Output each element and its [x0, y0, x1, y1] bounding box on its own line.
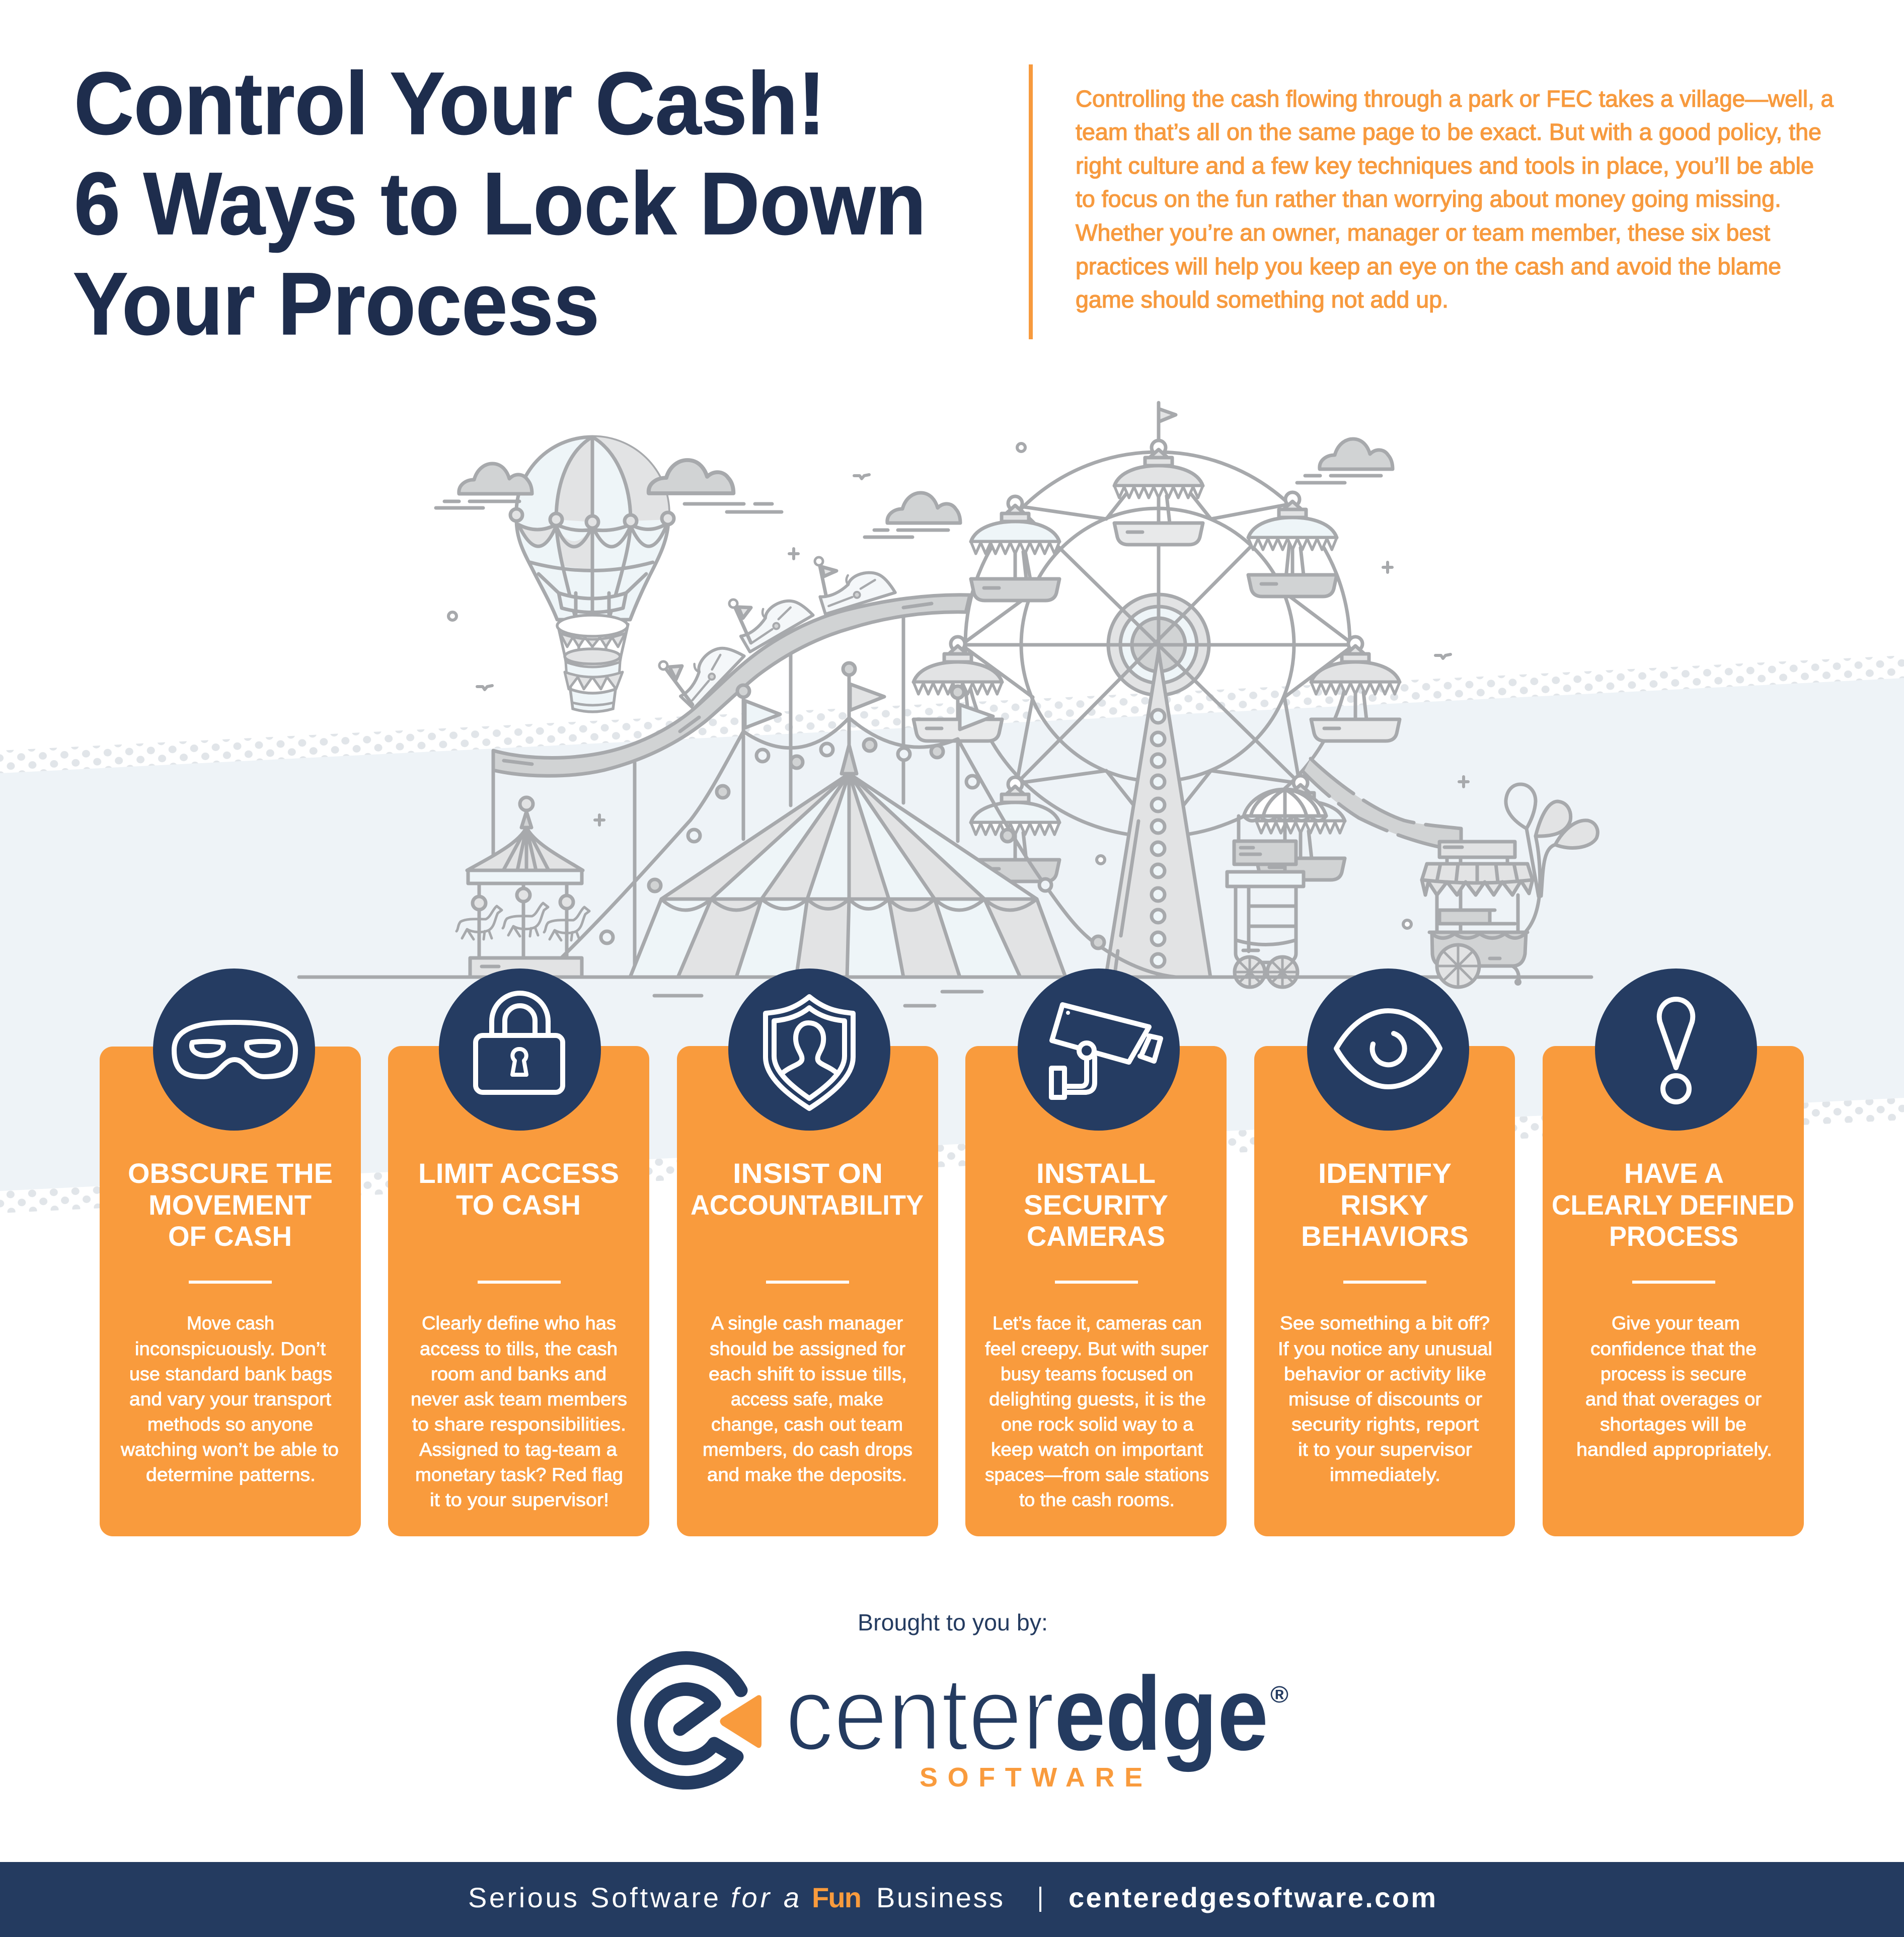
logo: centeredge software: ®: [1270, 1681, 1288, 1707]
body text: [120, 1313, 339, 1485]
coaster supports: [493, 617, 958, 977]
footer bar: Software: [590, 1882, 719, 1913]
footer bar: [0, 1862, 1904, 1937]
string lights and flags: [561, 663, 1176, 977]
title: [73, 54, 926, 353]
body text: handled appropriately.: [1576, 1439, 1772, 1460]
body text: members, do cash drops: [703, 1439, 912, 1460]
body text: delighting guests, it is the: [989, 1389, 1206, 1409]
body text: never ask team members: [411, 1389, 627, 1409]
left food cart: [1227, 789, 1326, 987]
card 3: insist on accountability: [677, 968, 938, 1536]
body text: and vary your transport: [129, 1389, 332, 1409]
heading: [128, 1157, 333, 1252]
heading: [418, 1157, 619, 1221]
body text: shortages will be: [1600, 1414, 1746, 1435]
body text: busy teams focused on: [1001, 1364, 1193, 1384]
hot air balloon: [510, 437, 674, 712]
body text: access safe, make: [731, 1389, 883, 1409]
heading: HAVE A: [1624, 1157, 1724, 1189]
footer bar: Fun: [812, 1882, 862, 1913]
slide: [1304, 759, 1461, 851]
amusement park illustration: [299, 403, 1597, 1006]
icon: exclamation mark: [1595, 968, 1757, 1131]
body text: [703, 1313, 912, 1485]
intro paragraph: right culture and a few key techniques and tools in place, you’ll be able: [1076, 153, 1814, 179]
body text: use standard bank bags: [129, 1364, 332, 1384]
heading: SECURITY: [1024, 1189, 1168, 1221]
body text: determine patterns.: [146, 1464, 316, 1485]
body text: [411, 1313, 627, 1510]
icon: mask: [153, 968, 315, 1131]
heading: ACCOUNTABILITY: [691, 1189, 924, 1221]
body text: to the cash rooms.: [1019, 1489, 1175, 1510]
ferris wheel tower: [1106, 651, 1210, 977]
right food cart with balloons: [1422, 784, 1597, 987]
title: Your Process: [73, 255, 599, 353]
body text: one rock solid way to a: [1001, 1414, 1193, 1435]
card 6: have a clearly defined process: [1543, 968, 1804, 1536]
heading: CAMERAS: [1027, 1220, 1165, 1252]
body text: it to your supervisor: [1298, 1439, 1472, 1460]
ground line: [299, 976, 1591, 979]
circus tent: [630, 745, 1065, 977]
coaster cars: [659, 557, 896, 709]
body text: access to tills, the cash: [420, 1338, 618, 1359]
body text: and make the deposits.: [707, 1464, 907, 1485]
body text: monetary task? Red flag: [415, 1464, 623, 1485]
sky details: [448, 443, 1468, 928]
icon: eye: [1307, 968, 1469, 1131]
body text: behavior or activity like: [1284, 1364, 1486, 1384]
body text: If you notice any unusual: [1278, 1338, 1492, 1359]
heading: OBSCURE THE: [128, 1157, 333, 1189]
heading: CLEARLY DEFINED: [1552, 1189, 1794, 1221]
footer bar: Serious: [468, 1882, 577, 1913]
heading: TO CASH: [456, 1189, 581, 1221]
body text: methods so anyone: [147, 1414, 313, 1435]
body text: watching won’t be able to: [120, 1439, 339, 1460]
intro paragraph: practices will help you keep an eye on the cash and avoid the blame: [1076, 253, 1781, 279]
body text: change, cash out team: [711, 1414, 903, 1435]
body text: feel creepy. But with super: [985, 1338, 1208, 1359]
intro paragraph: [1076, 86, 1834, 313]
footer bar: centeredgesoftware.com: [1069, 1882, 1436, 1913]
intro paragraph: to focus on the fun rather than worrying about money going missing.: [1076, 186, 1781, 212]
body text: See something a bit off?: [1280, 1313, 1490, 1333]
wordmark: center: [785, 1656, 1054, 1772]
title: Control Your Cash!: [74, 54, 825, 153]
logo: centeredge software: edge: [1054, 1656, 1268, 1772]
ferris wheel: [913, 403, 1400, 881]
body text: room and banks and: [431, 1364, 606, 1384]
logo: centeredge software: SOFTWARE: [920, 1762, 1143, 1793]
intro paragraph: Whether you’re an owner, manager or team member, these six best: [1076, 219, 1770, 246]
clouds: [436, 439, 1393, 537]
intro paragraph: team that’s all on the same page to be exact. But with a good policy, the: [1076, 119, 1821, 145]
heading: [1552, 1157, 1794, 1252]
body text: and that overages or: [1585, 1389, 1762, 1409]
logo: centeredge software: [624, 1656, 1288, 1793]
body text: keep watch on important: [991, 1439, 1203, 1460]
card 2: limit access to cash: [388, 968, 649, 1536]
body text: spaces—from sale stations: [985, 1464, 1209, 1485]
body text: inconspicuously. Don’t: [135, 1338, 326, 1359]
card 5: identify risky behaviors: [1254, 968, 1515, 1536]
heading: INSTALL: [1036, 1157, 1156, 1189]
body text: it to your supervisor!: [430, 1489, 609, 1510]
body text: confidence that the: [1590, 1338, 1757, 1359]
body text: A single cash manager: [711, 1313, 903, 1333]
card 4: install security cameras: [965, 968, 1227, 1536]
heading: [1024, 1157, 1168, 1252]
body text: each shift to issue tills,: [709, 1364, 907, 1384]
intro paragraph: Controlling the cash flowing through a park or FEC takes a village—well, a: [1076, 86, 1834, 112]
body text: process is secure: [1601, 1364, 1746, 1384]
heading: OF CASH: [168, 1220, 292, 1252]
icon: shield with person: [728, 968, 890, 1131]
body text: Assigned to tag-team a: [419, 1439, 617, 1460]
logo mark: [624, 1658, 760, 1783]
title: 6 Ways to Lock Down: [74, 155, 926, 253]
footer bar: for a: [731, 1882, 799, 1913]
heading: MOVEMENT: [148, 1189, 312, 1221]
heading: [691, 1157, 924, 1221]
heading: INSIST ON: [733, 1157, 883, 1189]
body text: immediately.: [1330, 1464, 1440, 1485]
intro paragraph: game should something not add up.: [1076, 286, 1449, 313]
heading: RISKY: [1340, 1189, 1428, 1221]
body text: Let’s face it, cameras can: [993, 1313, 1202, 1333]
icon: padlock: [439, 968, 601, 1131]
body text: Clearly define who has: [422, 1313, 616, 1333]
background band: [0, 655, 1904, 1213]
vertical divider: [1029, 64, 1033, 339]
body text: Move cash: [187, 1313, 274, 1333]
brought to you by: Brought to you by:: [858, 1609, 1048, 1635]
heading: BEHAVIORS: [1301, 1220, 1469, 1252]
carousel: [456, 797, 589, 977]
roller coaster track: [493, 595, 970, 776]
heading: LIMIT ACCESS: [418, 1157, 619, 1189]
body text: should be assigned for: [710, 1338, 905, 1359]
body text: security rights, report: [1291, 1414, 1479, 1435]
heading: IDENTIFY: [1318, 1157, 1452, 1189]
body text: Give your team: [1612, 1313, 1740, 1333]
heading: [1301, 1157, 1469, 1252]
body text: [985, 1313, 1209, 1510]
icon: security camera: [1018, 968, 1180, 1131]
heading: PROCESS: [1609, 1220, 1738, 1252]
body text: [1576, 1313, 1772, 1460]
card 1: obscure the movement of cash: [100, 968, 361, 1536]
body text: to share responsibilities.: [412, 1414, 626, 1435]
body text: [1278, 1313, 1492, 1485]
footer bar: Business: [876, 1882, 1003, 1913]
body text: misuse of discounts or: [1288, 1389, 1482, 1409]
